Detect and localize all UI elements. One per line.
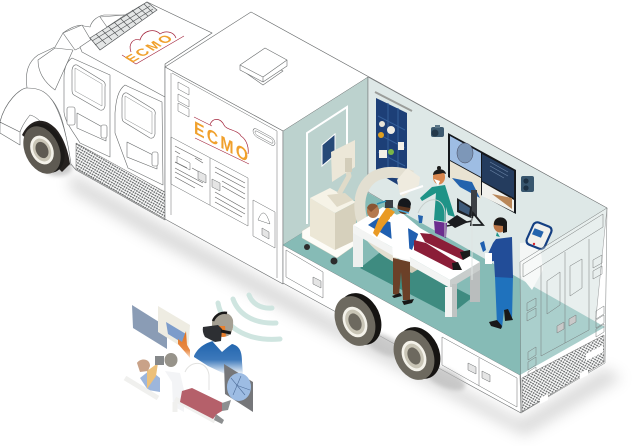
small trousers <box>180 388 225 419</box>
operator hand <box>178 331 190 358</box>
monitor cart <box>302 140 356 264</box>
skirt <box>283 245 521 413</box>
pill handle <box>253 127 275 147</box>
wall camera left <box>431 125 444 137</box>
small tube <box>185 363 209 390</box>
truck box <box>165 12 607 413</box>
blue machine on shelf <box>520 221 553 290</box>
windows <box>72 65 105 110</box>
video panel middle <box>158 306 190 351</box>
bed <box>353 207 480 317</box>
back wall <box>368 77 607 327</box>
nurse in green <box>420 166 455 238</box>
small doctor <box>164 353 178 367</box>
roof logo: ECMO <box>121 31 178 65</box>
wall camera right <box>521 176 534 192</box>
small patient <box>137 360 150 372</box>
front wheel <box>16 117 72 180</box>
operator head <box>213 313 233 337</box>
video panel left <box>132 305 167 349</box>
box logo: ECMO <box>194 117 250 168</box>
operator body <box>194 341 243 375</box>
display stand <box>471 190 483 225</box>
C-arm <box>360 168 423 273</box>
vents <box>178 82 189 117</box>
VR headset <box>203 325 222 342</box>
patient <box>367 200 470 270</box>
roof light bar <box>90 2 157 50</box>
bumper <box>0 122 20 145</box>
table shadow on floor <box>360 250 473 315</box>
doctor in white coat <box>390 198 423 305</box>
VR operator vignette <box>125 295 280 424</box>
tubing <box>418 200 445 237</box>
roof vent <box>240 48 287 85</box>
box roof <box>165 12 607 262</box>
box front details <box>171 73 517 407</box>
laptop <box>447 198 472 228</box>
cab <box>0 2 212 220</box>
skirt drawers <box>286 250 323 298</box>
signal arcs <box>218 295 280 339</box>
rear wheel one <box>327 286 409 362</box>
thin tube line <box>471 218 473 280</box>
rear grille <box>522 335 604 412</box>
wall display <box>448 133 516 214</box>
control panel <box>171 137 248 226</box>
interior room <box>283 77 607 375</box>
door frame outline <box>307 107 347 224</box>
box side front section <box>165 67 283 284</box>
door rear <box>115 85 163 185</box>
x-ray picture <box>322 134 335 166</box>
hood panel <box>38 48 73 90</box>
door handles <box>77 113 106 141</box>
rear transparent wall <box>520 208 607 413</box>
navy organizer <box>375 92 412 190</box>
scan panel <box>224 364 253 412</box>
left wall <box>283 77 368 245</box>
rear wheel two <box>386 320 469 395</box>
door front <box>64 58 110 157</box>
roof <box>80 2 212 97</box>
small table <box>125 378 215 421</box>
small service door <box>253 200 275 248</box>
ground shadow <box>70 172 622 436</box>
cab side grille <box>76 143 165 219</box>
cab silhouette <box>0 2 212 220</box>
nurse in blue <box>480 217 513 329</box>
floor <box>283 192 605 375</box>
